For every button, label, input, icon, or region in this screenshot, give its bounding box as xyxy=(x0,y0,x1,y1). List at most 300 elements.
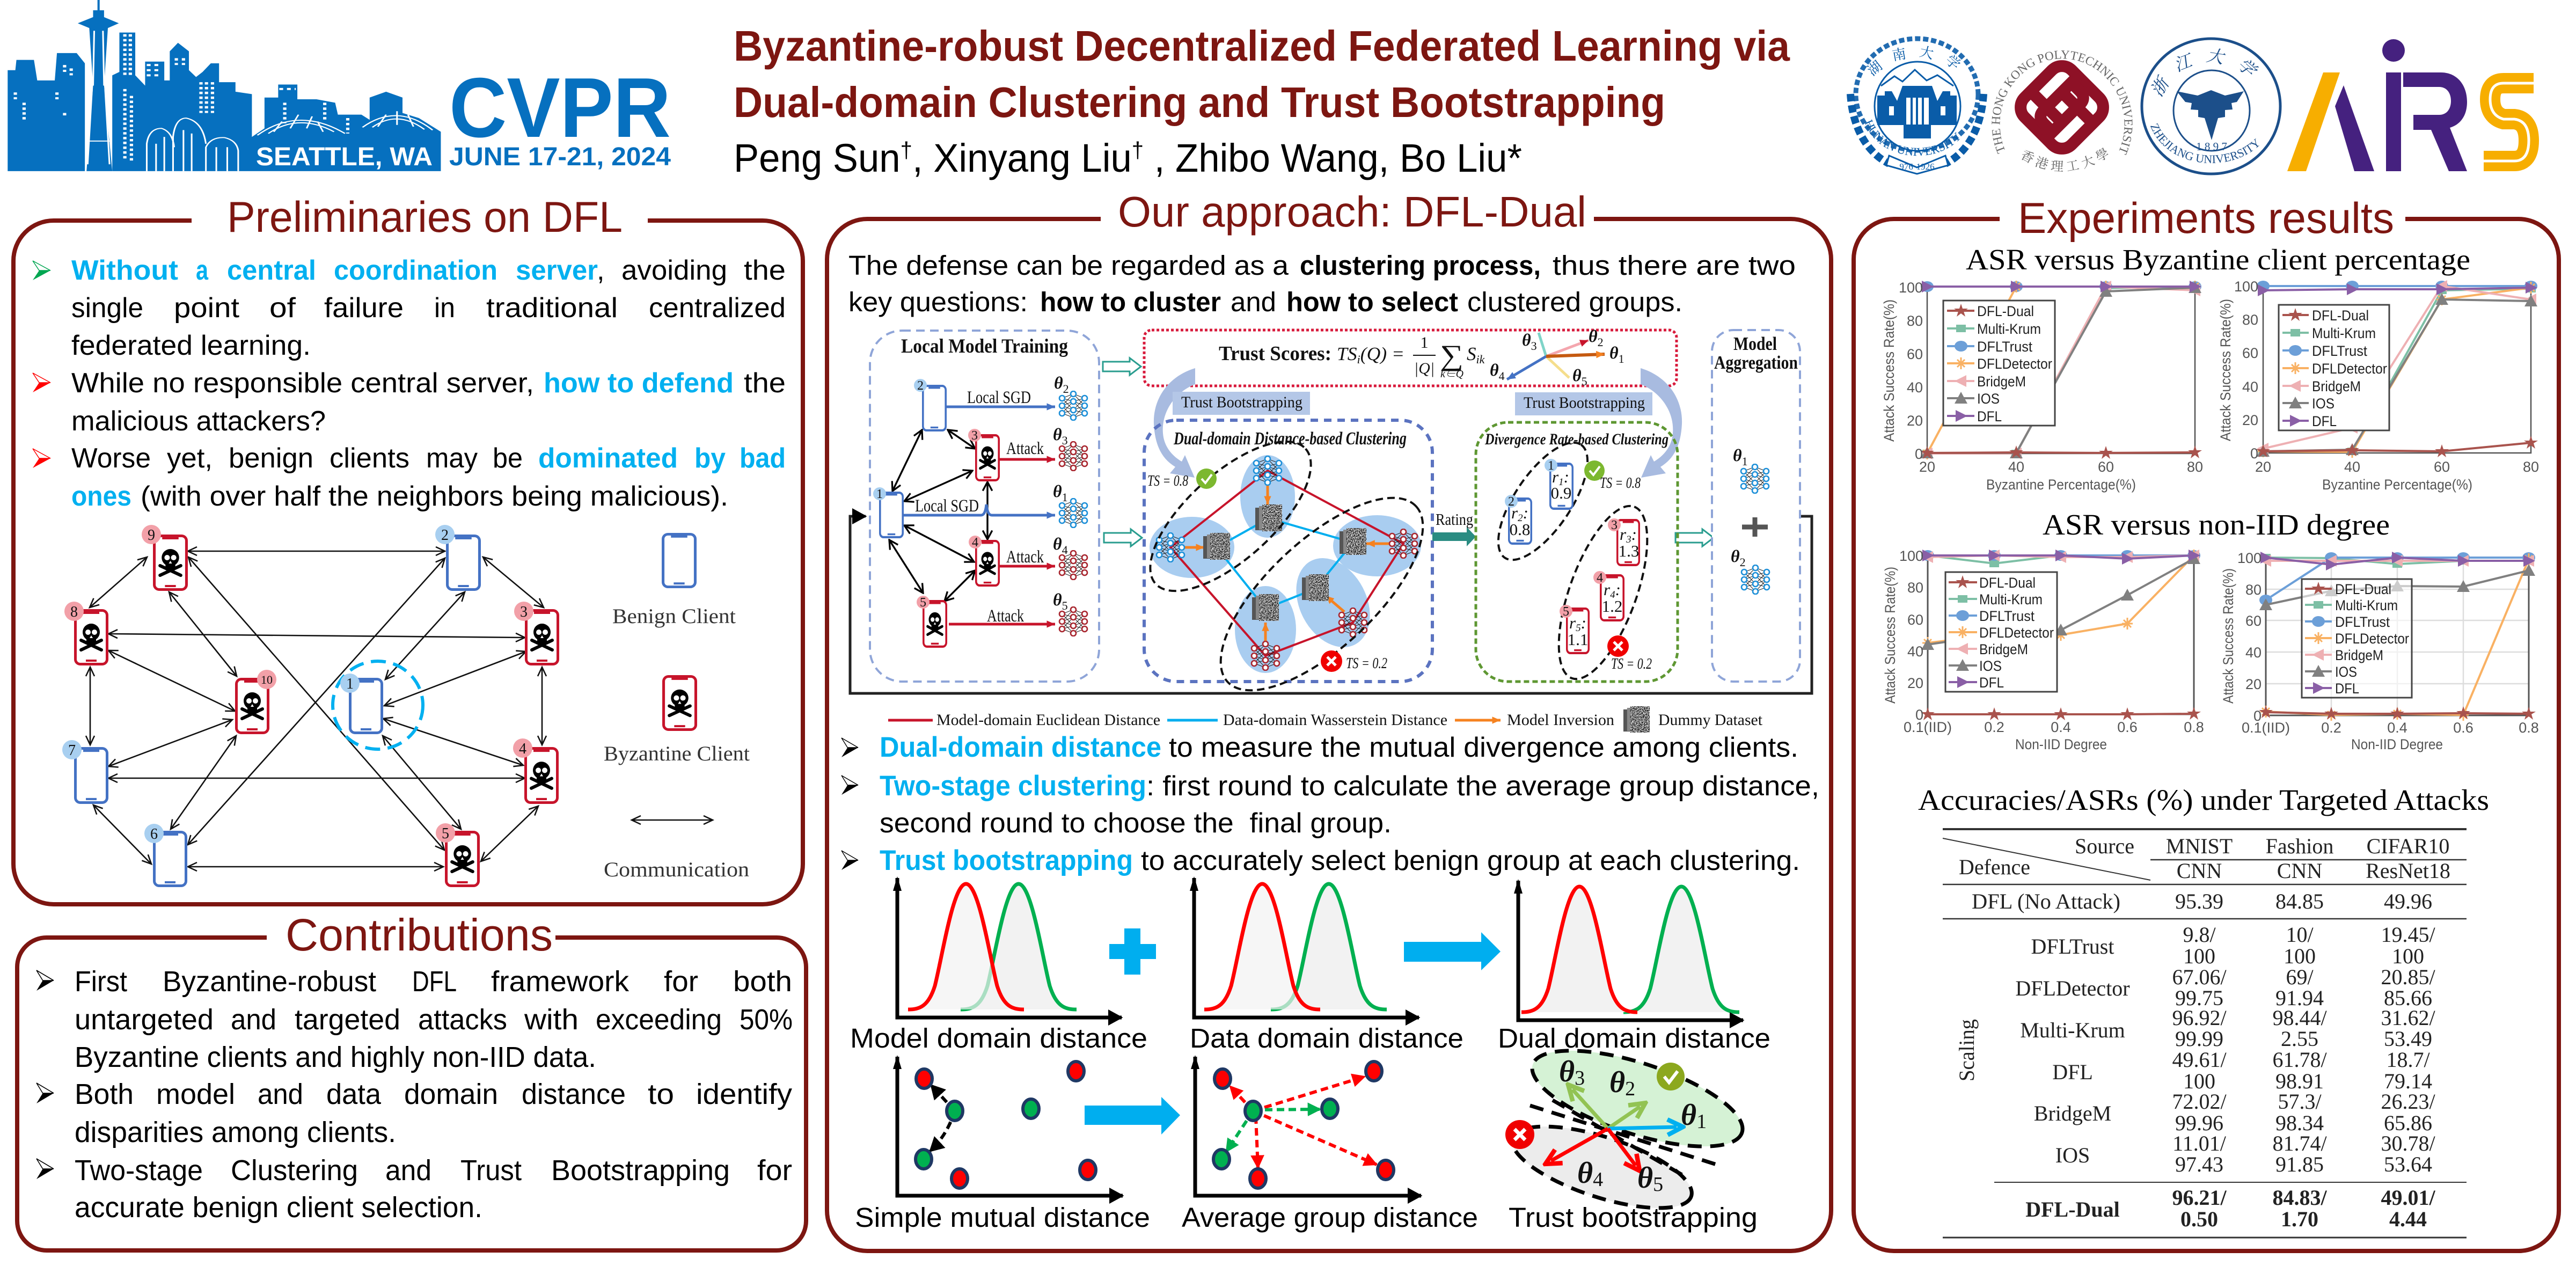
chart: ASR vs non-IID right: 40 xyxy=(2245,645,2262,661)
legend: BridgeM xyxy=(2312,378,2361,394)
text block: preliminaries bullets: Worse xyxy=(71,443,151,474)
heading: Experiments results: Experiments results xyxy=(2018,194,2394,243)
results table: 4.44 xyxy=(2389,1207,2427,1231)
box: trust scores: i xyxy=(1357,353,1360,366)
text block: contributions bullets: with xyxy=(524,1004,579,1036)
legend: DFLDetector xyxy=(1977,356,2052,372)
chart: trust bootstrapping: θ xyxy=(1559,1055,1575,1088)
box: model aggregation: Aggregation xyxy=(1714,352,1798,373)
box: divergence rate-based clustering: r xyxy=(1569,613,1576,632)
results table: CNN xyxy=(2277,859,2322,883)
text block: preliminaries bullets: traditional xyxy=(486,292,618,324)
results table: DFL (No Attack) xyxy=(1972,889,2120,913)
network diagram of clients: 3 xyxy=(520,604,528,620)
conference logo: CVPR 2024 Seattle: CVPR xyxy=(449,61,671,155)
box: local model training: 1 xyxy=(1062,491,1068,504)
logo: Hong Kong Polytechnic University xyxy=(1992,50,2133,172)
box: divergence rate-based clustering: r xyxy=(1511,503,1518,522)
box: local model training: 5 xyxy=(920,596,926,610)
logo: Zhejiang University: ZHEJIANG UNIVERSITY xyxy=(2150,123,2259,163)
text block: approach bullets: Dual-domain distance xyxy=(880,731,1161,763)
chart: average group distance: Average group distance xyxy=(1182,1202,1478,1233)
chart: ASR vs non-IID left: Non-IID Degree xyxy=(2015,736,2107,752)
box: local model training: θ xyxy=(1053,481,1062,501)
chart: ASR vs non-IID left: 60 xyxy=(1907,612,1923,628)
text block: contributions bullets: identify xyxy=(696,1078,792,1110)
box: divergence rate-based clustering: 2 xyxy=(1518,513,1523,524)
box: trust scores: TS xyxy=(1337,343,1357,364)
subheading: ASR versus non-IID degree: ASR versus non-IID degree xyxy=(2043,508,2390,541)
box: local model training: 2 xyxy=(1063,382,1069,396)
legend: DFL-Dual xyxy=(1979,575,2036,591)
conference logo: CVPR 2024 Seattle: SEATTLE, WA xyxy=(256,143,433,171)
results table: 49.01/ xyxy=(2381,1185,2435,1210)
box: model aggregation: θ xyxy=(1731,546,1740,566)
box: divergence rate-based clustering: r xyxy=(1552,467,1558,486)
box: divergence rate-based clustering: r xyxy=(1620,525,1626,544)
results table: 2.55 xyxy=(2281,1027,2318,1051)
text block: contributions bullets: 50% xyxy=(740,1004,793,1036)
chart: ASR vs byzantine percentage right: 60 xyxy=(2242,345,2258,361)
network diagram of clients: 8 xyxy=(70,604,78,620)
box: divergence rate-based clustering: 5 xyxy=(1576,623,1581,634)
box: trust scores: |Q| xyxy=(1414,360,1435,377)
results table xyxy=(1943,829,2467,1238)
results table: 99.75 xyxy=(2175,986,2223,1010)
results table: DFLTrust xyxy=(2031,934,2114,958)
box: dual-domain clustering xyxy=(1127,417,1453,721)
text block: approach bullets: Trust bootstrapping xyxy=(880,845,1133,876)
box: trust scores: 1 xyxy=(1420,334,1429,352)
results table: 85.66 xyxy=(2384,986,2432,1010)
legend: DFL-Dual xyxy=(1977,303,2034,319)
chart: ASR vs non-IID left xyxy=(1882,548,2204,752)
chart: ASR vs non-IID left: Attack Success Rate(%) xyxy=(1882,567,1898,704)
chart: ASR vs non-IID right: 0.1(IID) xyxy=(2242,720,2290,736)
logo: Hunan University: 湖南大学 xyxy=(1866,46,1961,76)
box: divergence rate-based clustering: 3 xyxy=(1611,518,1618,532)
trust bootstrapping labels and curved arrows xyxy=(1154,368,1682,478)
box: divergence rate-based clustering: 3 xyxy=(1626,534,1631,545)
logo: Zhejiang University: 1 8 9 7 xyxy=(2196,140,2227,153)
box: model aggregation: 1 xyxy=(1742,455,1748,468)
results table: 100 xyxy=(2284,944,2316,968)
chart: ASR vs byzantine percentage right: 100 xyxy=(2234,279,2258,295)
chart: ASR vs byzantine percentage left: 20 xyxy=(1907,413,1923,429)
legend: DFLDetector xyxy=(2335,631,2409,647)
results table: Source xyxy=(2075,834,2134,858)
results table: 98.91 xyxy=(2275,1069,2324,1093)
box: trust scores: 4 xyxy=(1499,369,1505,383)
network diagram of clients: 9 xyxy=(148,527,155,544)
results table: Fashion xyxy=(2266,834,2333,858)
legend: Multi-Krum xyxy=(2312,325,2376,341)
text block: approach bullets: Two-stage clustering xyxy=(880,770,1146,802)
text block: contributions bullets: Byzantine-robust xyxy=(163,965,376,998)
box: divergence rate-based clustering: 5 xyxy=(1563,605,1569,619)
results table: 11.01/ xyxy=(2172,1131,2227,1155)
chart: ASR vs non-IID right: 100 xyxy=(2237,550,2262,566)
box: local model training: Local Model Training xyxy=(901,335,1068,357)
text block: preliminaries bullets: the xyxy=(744,368,786,399)
box: local model training: Local SGD xyxy=(915,496,979,516)
text block: contributions bullets: for xyxy=(664,965,698,998)
authors: Peng Sun xyxy=(734,136,908,180)
diagram legend: Model-domain Euclidean Distance xyxy=(936,711,1160,729)
diagram legend: Model Inversion xyxy=(1507,711,1614,729)
diagram legend: Data-domain Wasserstein Distance xyxy=(1223,711,1447,729)
text block: contributions bullets: both xyxy=(733,965,792,998)
box: trust scores: θ xyxy=(1609,343,1619,362)
icon: plus xyxy=(1109,928,1156,975)
text block: contributions bullets: Clustering xyxy=(231,1154,358,1187)
panel: Preliminaries on DFL xyxy=(13,193,803,904)
text block: preliminaries bullets: ones xyxy=(71,481,131,512)
logo: Hunan University: 976·1926 xyxy=(1899,162,1935,172)
box: divergence rate-based clustering: 1 xyxy=(1548,459,1554,473)
box: trust scores: 2 xyxy=(1598,335,1604,349)
text block: contributions bullets: DFL xyxy=(412,965,457,998)
text block: contributions bullets: model xyxy=(156,1078,235,1110)
results table: Scaling xyxy=(1955,1019,1979,1081)
chart: ASR vs non-IID left: 0.2 xyxy=(1984,719,2004,735)
arrow: mutual to group xyxy=(1085,1097,1180,1135)
box: divergence rate-based clustering: 0.8 xyxy=(1510,520,1530,539)
chart: model domain distance: Model domain distance xyxy=(850,1023,1147,1053)
chart: trust bootstrapping: 2 xyxy=(1625,1078,1635,1100)
logo: Zhejiang University: 浙江大学 xyxy=(2151,48,2259,97)
box: divergence rate-based clustering: 1.3 xyxy=(1619,541,1639,560)
box: trust scores: ik xyxy=(1476,353,1485,366)
chart: ASR vs non-IID left: 100 xyxy=(1899,548,1923,564)
text block: intro: and xyxy=(1231,287,1276,317)
chart: ASR vs byzantine percentage right: 80 xyxy=(2523,459,2539,475)
authors: , Xinyang Liu xyxy=(912,136,1132,180)
text block: contributions bullets: Two-stage xyxy=(75,1154,203,1187)
title xyxy=(734,22,1790,126)
chart: ASR vs byzantine percentage left: 40 xyxy=(2008,459,2024,475)
network diagram of clients: 5 xyxy=(442,825,449,842)
text block: preliminaries bullets: central xyxy=(227,255,316,286)
chart: ASR vs non-IID left: 40 xyxy=(1907,643,1923,660)
legend: IOS xyxy=(2312,396,2334,412)
text block: preliminaries bullets: While no responsible central server, xyxy=(71,368,534,399)
text block: intro: how to select xyxy=(1286,287,1458,317)
text block: contributions bullets: and xyxy=(231,1004,276,1036)
box: trust scores: 5 xyxy=(1582,375,1587,388)
box: model aggregation: 2 xyxy=(1740,555,1746,569)
box: model aggregation: θ xyxy=(1733,445,1742,465)
legend: IOS xyxy=(2335,664,2357,680)
heading: Our approach DFL-Dual: Our approach: DFL-Dual xyxy=(1118,188,1586,236)
framework diagram xyxy=(850,326,1812,733)
heading: Preliminaries on DFL: Preliminaries on DFL xyxy=(227,193,623,241)
chart: ASR vs byzantine percentage left: 0 xyxy=(1915,446,1923,462)
trust bootstrapping labels and curved arrows: Trust Bootstrapping xyxy=(1524,394,1645,412)
results table: 100 xyxy=(2183,944,2215,968)
rating arrow: Rating xyxy=(1436,510,1473,529)
results table: IOS xyxy=(2055,1143,2090,1167)
box: trust scores: k∈Q xyxy=(1440,368,1464,380)
results table: 30.78/ xyxy=(2381,1131,2435,1155)
text block: intro: how to cluster xyxy=(1040,287,1221,317)
text block: contributions bullets: disparities among clients. xyxy=(75,1116,396,1148)
results table: 67.06/ xyxy=(2172,965,2227,989)
box: local model training xyxy=(870,331,1099,682)
results table: 0.50 xyxy=(2180,1207,2218,1231)
chart: ASR vs non-IID right: 0.6 xyxy=(2453,720,2473,736)
legend: DFL-Dual xyxy=(2312,308,2369,324)
chart: ASR vs byzantine percentage left: 20 xyxy=(1919,459,1935,475)
text block: preliminaries bullets: centralized xyxy=(649,292,786,324)
chart: trust bootstrapping: θ xyxy=(1609,1066,1625,1099)
chart: data domain distance: Data domain distance xyxy=(1190,1023,1463,1053)
logo: Hunan University xyxy=(1847,36,1987,175)
box: local model training: θ xyxy=(1054,373,1063,392)
box: local model training: 1 xyxy=(876,487,883,501)
results table: 69/ xyxy=(2286,965,2314,989)
text block: intro xyxy=(848,250,1796,317)
box: divergence rate-based clustering: : xyxy=(1523,503,1528,522)
legend: benign client: Benign Client xyxy=(612,605,736,628)
box: local model training: 4 xyxy=(972,536,978,550)
box: trust scores: θ xyxy=(1589,326,1598,346)
text block: preliminaries bullets: single xyxy=(71,292,143,324)
logo: Hong Kong Polytechnic University: 香港理工大學 xyxy=(2022,148,2108,172)
legend: IOS xyxy=(1977,391,2000,407)
chart: ASR vs byzantine percentage right: Attack Success Rate(%) xyxy=(2218,299,2234,441)
text block: preliminaries bullets: be xyxy=(493,443,523,474)
box: divergence rate-based clustering: : xyxy=(1581,613,1586,632)
results table: 91.85 xyxy=(2275,1152,2324,1176)
chart: average group distance xyxy=(1182,1055,1478,1233)
chart: trust bootstrapping: 3 xyxy=(1575,1067,1585,1089)
network diagram of clients xyxy=(62,525,558,885)
results table: Defence xyxy=(1959,855,2030,879)
text block: intro: thus there are two xyxy=(1553,250,1796,281)
text block: contributions bullets: targeted xyxy=(295,1004,400,1036)
text block: preliminaries bullets: may xyxy=(426,443,478,474)
chart: dual domain distance xyxy=(1498,879,1770,1053)
text block: contributions bullets: and xyxy=(385,1154,431,1187)
results table: 72.02/ xyxy=(2172,1089,2227,1114)
results table: 98.34 xyxy=(2275,1111,2324,1135)
results table: 10/ xyxy=(2286,923,2314,947)
legend: DFL xyxy=(2312,413,2337,429)
text block: approach bullets: : first round to calculate the average group distance, xyxy=(1146,771,1819,802)
legend xyxy=(1943,301,2055,426)
chart: ASR vs byzantine percentage left: Attack Success Rate(%) xyxy=(1881,299,1897,442)
chart: ASR vs non-IID right: 0.4 xyxy=(2387,720,2407,736)
results table: 96.21/ xyxy=(2172,1185,2227,1210)
text block: preliminaries bullets: avoiding xyxy=(621,255,727,286)
box: trust scores: θ xyxy=(1522,330,1531,349)
chart: data domain distance xyxy=(1190,876,1463,1053)
results table: 98.44/ xyxy=(2272,1006,2327,1030)
box: trust scores: Trust Scores: xyxy=(1219,342,1331,365)
chart: simple mutual distance xyxy=(855,1055,1150,1233)
legend: DFL xyxy=(1977,408,2002,425)
box: local model training: θ xyxy=(1053,425,1062,444)
legend: DFLTrust xyxy=(1979,608,2035,624)
box: trust scores: (Q) = xyxy=(1360,343,1404,364)
box: local model training: 3 xyxy=(971,429,978,443)
logo: AIRS xyxy=(2287,39,2534,171)
chart: ASR vs non-IID left: 0.6 xyxy=(2117,719,2138,735)
box: local model training: 3 xyxy=(1062,434,1068,447)
authors: † xyxy=(901,137,912,163)
box: local model training: 5 xyxy=(1062,599,1068,612)
text block: intro: The defense can be regarded as a xyxy=(848,250,1289,281)
box: divergence rate-based clustering: : xyxy=(1564,467,1569,486)
results table: 99.99 xyxy=(2175,1027,2223,1051)
text block: contributions bullets: data xyxy=(326,1078,382,1110)
text block: preliminaries bullets: federated learning. xyxy=(71,330,311,361)
logo: Zhejiang University xyxy=(2140,38,2282,175)
box: divergence rate-based clustering: 4 xyxy=(1597,571,1603,585)
subheading: ASR versus Byzantine client percentage: ASR versus Byzantine client percentage xyxy=(1966,243,2470,276)
results table: 91.94 xyxy=(2275,986,2324,1010)
text block: preliminaries bullets: coordination xyxy=(334,255,497,286)
arrow: model plus data to dual xyxy=(1404,932,1501,970)
trust bootstrapping labels and curved arrows: Trust Bootstrapping xyxy=(1181,393,1302,411)
box: divergence rate-based clustering: 4 xyxy=(1610,589,1615,601)
text block: approach bullets: second round to choose the final group. xyxy=(880,808,1392,839)
chart: ASR vs byzantine percentage left xyxy=(1881,280,2203,493)
box: trust scores: θ xyxy=(1572,365,1582,385)
box: divergence rate-based clustering: 2 xyxy=(1508,495,1514,509)
results table: 18.7/ xyxy=(2386,1048,2430,1072)
text block: preliminaries bullets: dominated xyxy=(538,443,678,474)
chart: trust bootstrapping: 1 xyxy=(1696,1110,1707,1133)
results table: DFL-Dual xyxy=(2025,1197,2120,1221)
box: divergence rate-based clustering xyxy=(1476,422,1678,690)
rating arrow xyxy=(1432,510,1476,546)
chart: ASR vs non-IID right: 60 xyxy=(2245,613,2262,629)
legend: Multi-Krum xyxy=(2335,597,2398,613)
legend: benign client xyxy=(612,534,736,628)
text block: contributions bullets: Byzantine clients and highly non-IID data. xyxy=(75,1041,596,1073)
text block: preliminaries bullets: how to defend xyxy=(544,368,734,399)
chart: ASR vs byzantine percentage right: Byzantine Percentage(%) xyxy=(2322,477,2472,493)
box: divergence rate-based clustering: Divergence Rate-based Clustering xyxy=(1484,430,1668,448)
text block: contributions bullets: exceeding xyxy=(596,1004,722,1036)
legend: BridgeM xyxy=(2335,647,2383,663)
chart: ASR vs non-IID right: 20 xyxy=(2245,676,2262,692)
results table: 53.49 xyxy=(2384,1027,2432,1051)
text block: contributions bullets: and xyxy=(258,1078,303,1110)
chart: dual domain distance: Dual domain distance xyxy=(1498,1023,1770,1053)
chart: ASR vs non-IID right: 0 xyxy=(2253,708,2262,724)
legend: Multi-Krum xyxy=(1977,321,2041,337)
chart: trust bootstrapping: 4 xyxy=(1593,1168,1603,1191)
text block: preliminaries bullets: point xyxy=(174,292,240,324)
box: local model training: θ xyxy=(1053,590,1062,609)
chart: ASR vs non-IID right: 0.8 xyxy=(2519,720,2539,736)
chart: ASR vs non-IID left: 0.1(IID) xyxy=(1904,719,1952,735)
chart: trust bootstrapping: θ xyxy=(1577,1157,1593,1190)
box: trust scores: 1 xyxy=(1619,352,1624,365)
text block: preliminaries bullets: of xyxy=(269,292,296,324)
text block: preliminaries bullets: server xyxy=(516,255,598,286)
logo: Hunan University: HUNAN UNIVERSITY xyxy=(1864,119,1960,156)
results table: 100 xyxy=(2392,944,2424,968)
results table: 95.39 xyxy=(2175,889,2223,913)
arrows: outlined teal xyxy=(1103,358,1714,546)
chart: ASR vs non-IID left: 0 xyxy=(1915,707,1923,723)
box: local model training: Attack xyxy=(987,606,1024,626)
results table: 26.23/ xyxy=(2381,1089,2435,1114)
results table: CNN xyxy=(2177,859,2222,883)
results table: 97.43 xyxy=(2175,1152,2223,1176)
box: divergence rate-based clustering: 1.1 xyxy=(1568,630,1588,649)
authors: , Zhibo Wang, Bo Liu* xyxy=(1144,136,1522,180)
text block: contributions bullets: to xyxy=(648,1078,674,1110)
text block: contributions bullets: Trust xyxy=(460,1154,522,1187)
chart: ASR vs non-IID left: 80 xyxy=(1907,580,1923,596)
text block: preliminaries bullets: Without xyxy=(71,255,178,286)
diagram legend: Dummy Dataset xyxy=(1658,711,1763,729)
results table: CIFAR10 xyxy=(2367,834,2449,858)
results table: 49.61/ xyxy=(2172,1048,2227,1072)
text block: contributions bullets: Bootstrapping xyxy=(551,1154,730,1187)
text block: preliminaries bullets: , xyxy=(597,255,604,286)
legend: DFLTrust xyxy=(1977,339,2032,355)
chart: ASR vs non-IID right xyxy=(2220,550,2539,752)
chart: ASR vs non-IID left: 0.8 xyxy=(2184,719,2204,735)
text block: contributions bullets: attacks xyxy=(418,1004,507,1036)
box: divergence rate-based clustering: : xyxy=(1631,525,1637,544)
text block: preliminaries bullets: a xyxy=(196,255,209,286)
chart: ASR vs byzantine percentage left: 60 xyxy=(2098,459,2114,475)
text block: preliminaries bullets: bad xyxy=(740,443,786,474)
legend xyxy=(1945,572,2057,692)
chart: ASR vs byzantine percentage left: 80 xyxy=(1907,313,1923,329)
chart: ASR vs byzantine percentage left: 100 xyxy=(1899,280,1923,296)
results table: ResNet18 xyxy=(2366,859,2450,883)
legend: BridgeM xyxy=(1977,374,2026,390)
chart: ASR vs byzantine percentage left: 40 xyxy=(1907,379,1923,396)
chart: ASR vs byzantine percentage right: 40 xyxy=(2344,459,2360,475)
legend: byzantine client xyxy=(604,676,750,765)
text block: approach bullets xyxy=(841,731,1819,876)
box: local model training: 4 xyxy=(1062,543,1068,557)
legend: BridgeM xyxy=(1979,641,2028,657)
chart: ASR vs byzantine percentage left: 80 xyxy=(2187,459,2203,475)
results table: BridgeM xyxy=(2034,1101,2111,1125)
chart: trust bootstrapping: θ xyxy=(1637,1161,1653,1195)
subheading: accuracies under targeted attacks: Accuracies/ASRs (%) under Targeted Attacks xyxy=(1918,784,2489,816)
results table: 20.85/ xyxy=(2381,965,2435,989)
conference logo: CVPR 2024 Seattle xyxy=(8,0,671,171)
box: divergence rate-based clustering: 1 xyxy=(1558,477,1564,488)
box: local model training: Attack xyxy=(1006,439,1044,458)
text block: contributions bullets xyxy=(36,965,793,1224)
chart: ASR vs byzantine percentage right: 40 xyxy=(2242,379,2258,395)
text block: contributions bullets: accurate benign client selection. xyxy=(75,1191,482,1224)
box: dual-domain clustering: TS = 0.2 xyxy=(1346,655,1387,672)
text block: contributions bullets: for xyxy=(757,1154,792,1187)
chart: ASR vs byzantine percentage right: 80 xyxy=(2242,312,2258,328)
box: divergence rate-based clustering: 1.2 xyxy=(1602,597,1622,616)
legend xyxy=(2279,305,2389,430)
text block: contributions bullets: Both xyxy=(75,1078,134,1110)
results table: 9.8/ xyxy=(2183,923,2216,947)
results table: 79.14 xyxy=(2384,1069,2432,1093)
legend: DFLDetector xyxy=(2312,361,2387,377)
box: divergence rate-based clustering: TS = 0.8 xyxy=(1600,475,1641,492)
heading: Contributions: Contributions xyxy=(286,910,553,960)
